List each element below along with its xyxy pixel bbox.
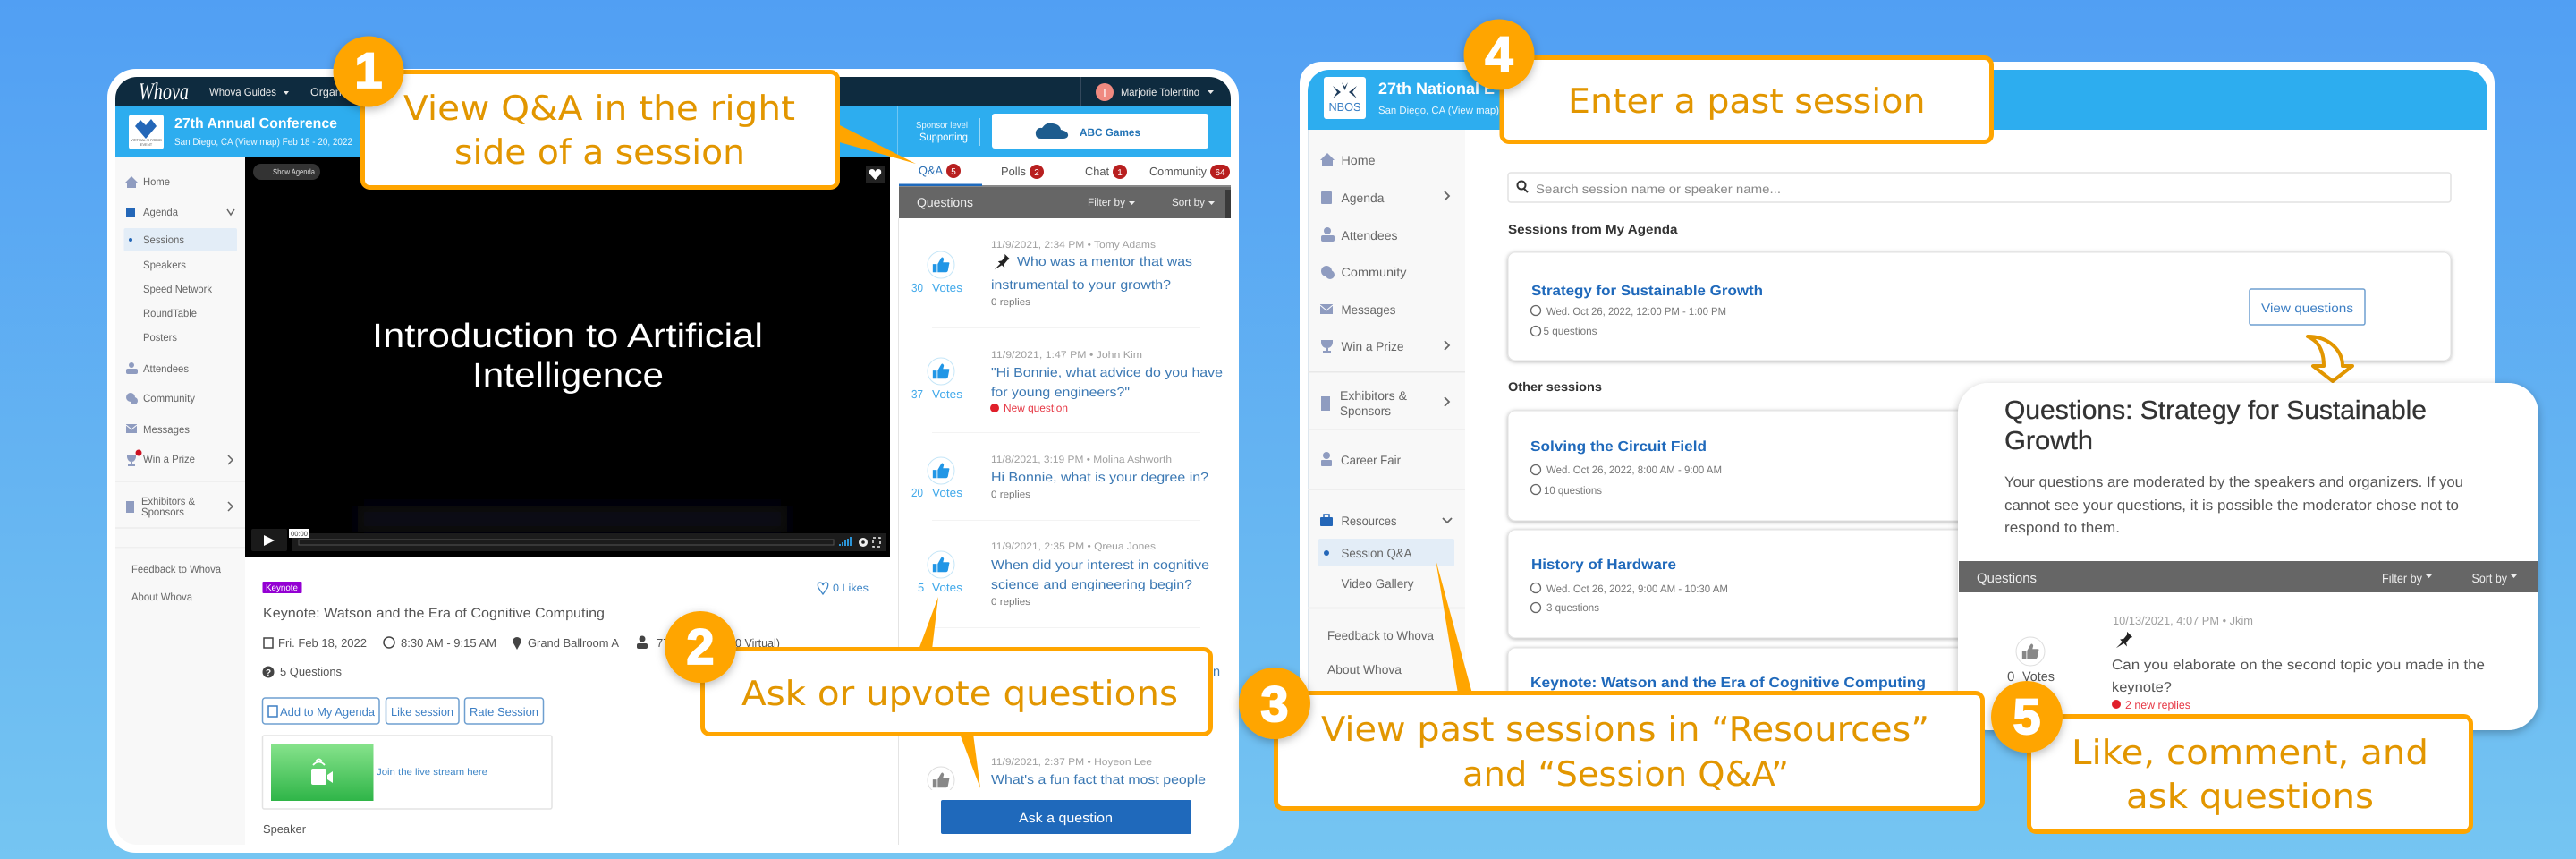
question 4: [918, 541, 1209, 608]
video title: Intelligence: [472, 357, 664, 395]
popup questions toolbar: Filter by: [2382, 571, 2422, 585]
popup question item: [2007, 614, 2485, 711]
sidebar navigation: Video Gallery: [1342, 576, 1413, 591]
sidebar navigation: RoundTable: [143, 307, 197, 319]
session action buttons: [263, 698, 544, 724]
session card: keynote: [1504, 646, 1958, 691]
popup questions toolbar: Questions: [1977, 571, 2037, 586]
speaker heading: Speaker: [263, 822, 307, 836]
callout 3: view past sessions: [1239, 559, 1982, 809]
sidebar navigation: Messages: [143, 423, 190, 436]
video player: Show Agenda: [273, 167, 315, 176]
session action buttons: Rate Session: [470, 705, 538, 719]
question 2: Votes: [932, 387, 963, 401]
event header bar: VIRTUAL / HYBRID: [131, 138, 162, 142]
popup description: cannot see your questions, it is possible the moderator chose not to: [2004, 498, 2459, 514]
sidebar navigation: Session Q&A: [1342, 546, 1412, 560]
question 2: 11/9/2021, 1:47 PM • John Kim: [991, 350, 1142, 361]
top navigation bar: Organizer: [310, 86, 360, 98]
question 1: 0 replies: [991, 297, 1031, 308]
sidebar navigation: About Whova: [131, 591, 192, 603]
question 1: 30: [911, 281, 923, 294]
sidebar navigation: Attendees: [143, 362, 189, 375]
sidebar navigation: Feedback to Whova: [1327, 628, 1434, 642]
callout 4: enter past session: Enter a past session: [1568, 81, 1925, 121]
question 1: Votes: [932, 281, 963, 294]
live stream card: [263, 736, 552, 809]
session tabs: Q&A: [919, 164, 943, 177]
event header bar: [115, 106, 1231, 157]
questions toolbar: Sort by: [1172, 196, 1205, 208]
sidebar navigation: Resources: [1342, 514, 1397, 528]
sidebar navigation: Feedback to Whova: [131, 563, 221, 575]
sidebar navigation: Win a Prize: [143, 453, 195, 465]
question 3: Votes: [932, 486, 963, 499]
video title: Introduction to Artificial: [372, 318, 763, 355]
popup description: respond to them.: [2004, 520, 2120, 536]
sidebar navigation: Community: [143, 392, 195, 404]
session tabs: 64: [1215, 168, 1225, 178]
popup description: Your questions are moderated by the speakers and organizers. If you: [2004, 474, 2463, 490]
panel: live session page: [107, 69, 1239, 853]
event header bar: 27th Annual Conference: [174, 116, 337, 132]
live stream card: Join the live stream here: [377, 767, 487, 778]
step badge 2: [665, 611, 736, 683]
question 4: 5: [918, 581, 924, 594]
event header bar: Supporting: [919, 131, 968, 143]
sidebar navigation: [1308, 130, 1465, 691]
video player: [245, 157, 890, 557]
sidebar navigation: Home: [143, 175, 170, 188]
popup question item: 2 new replies: [2125, 699, 2190, 711]
event header: San Diego, CA (View map): [1378, 106, 1499, 116]
session details: Grand Ballroom A: [528, 636, 619, 650]
session tabs: 2: [1034, 168, 1039, 178]
sidebar navigation: Speakers: [143, 259, 186, 271]
search box: Search session name or speaker name...: [1536, 182, 1781, 196]
step badge 3: [1239, 668, 1310, 739]
event header bar: ABC Games: [1080, 126, 1140, 139]
panel: live session page: n: [1213, 665, 1220, 679]
questions toolbar: [899, 187, 1231, 218]
session card: solving the circuit field: Wed. Oct 26, 2022, 8:00 AM - 9:00 AM: [1546, 464, 1722, 476]
event header bar: Sponsor level: [916, 121, 968, 131]
callout 5: like comment ask: ask questions: [2126, 777, 2374, 816]
session details: ?: [266, 668, 271, 678]
session card: history of hardware: [1504, 528, 1958, 642]
question 2: New question: [1004, 402, 1068, 414]
callout 4: enter past session: [1463, 20, 1991, 141]
session details: 0 Virtual): [735, 636, 780, 650]
callout 3: view past sessions: and “Session Q&A”: [1462, 754, 1789, 794]
callout 1: view Q&A: side of a session: [454, 132, 745, 172]
questions toolbar: Filter by: [1088, 196, 1125, 208]
session details: 77: [657, 636, 669, 650]
popup title: [2004, 396, 2427, 455]
popup title: Growth: [2004, 427, 2093, 455]
sidebar navigation: Home: [1342, 153, 1376, 167]
session card: solving the circuit field: [1504, 408, 1959, 524]
question 5: [927, 758, 1206, 790]
step badge 5: 5: [2012, 688, 2041, 744]
questions toolbar: Questions: [917, 195, 973, 209]
sidebar navigation: Win a Prize: [1342, 339, 1404, 353]
question 1: 11/9/2021, 2:34 PM • Tomy Adams: [991, 240, 1157, 251]
event header bar: EVENT: [140, 142, 153, 147]
step badge 4: [1463, 20, 1535, 89]
session tabs: 1: [1117, 168, 1123, 178]
sidebar navigation: Sessions: [143, 234, 184, 246]
callout 2: ask or upvote: Ask or upvote questions: [741, 674, 1178, 713]
sidebar navigation: Exhibitors &: [1340, 388, 1408, 403]
sidebar navigation: Agenda: [1342, 191, 1385, 205]
session card: strategy for sustainable growth: 5 questions: [1544, 325, 1597, 337]
step badge 3: 3: [1260, 676, 1289, 732]
question 2: [911, 350, 1223, 414]
session details: [263, 582, 869, 678]
question 4: When did your interest in cognitive: [991, 558, 1209, 573]
step badge 2: 2: [686, 618, 715, 675]
event header: 27th National E: [1378, 80, 1495, 98]
session details: Fri. Feb 18, 2022: [278, 636, 367, 650]
session card: history of hardware: Wed. Oct 26, 2022, 9:00 AM - 10:30 AM: [1546, 583, 1728, 595]
top navigation bar: T: [1101, 86, 1108, 99]
sidebar navigation: Messages: [1342, 302, 1395, 317]
sidebar navigation: [115, 176, 245, 601]
event header bar: San Diego, CA (View map) Feb 18 - 20, 2022: [174, 137, 352, 148]
view questions button: View questions: [2261, 301, 2353, 315]
session tabs: Chat: [1085, 165, 1109, 178]
panel: questions popup: [1958, 383, 2538, 730]
session card: solving the circuit field: Solving the Circuit Field: [1530, 439, 1707, 455]
popup question item: Votes: [2022, 669, 2055, 685]
popup question item: 10/13/2021, 4:07 PM • Jkim: [2113, 614, 2253, 627]
question 3: 0 replies: [991, 489, 1031, 500]
session details: 8:30 AM - 9:15 AM: [401, 636, 496, 650]
question 2: for young engineers?": [991, 386, 1130, 400]
sidebar navigation: Agenda: [143, 206, 178, 218]
question 2: "Hi Bonnie, what advice do you have: [991, 366, 1223, 380]
top navigation bar: Whova: [139, 78, 189, 105]
step badge 5: [1991, 681, 2063, 753]
popup description: [2004, 474, 2463, 536]
question 3: 20: [911, 486, 923, 499]
heading: sessions from my agenda: Sessions from My Agenda: [1508, 222, 1678, 236]
question 3: Hi Bonnie, what is your degree in?: [991, 471, 1208, 485]
top navigation bar: Marjorie Tolentino: [1121, 86, 1199, 98]
sidebar navigation: Career Fair: [1341, 453, 1401, 467]
popup questions toolbar: [1959, 561, 2538, 592]
question 4: 0 replies: [991, 597, 1031, 608]
step badge 1: [333, 36, 404, 107]
video title: [372, 318, 763, 395]
sidebar navigation: Posters: [143, 331, 177, 344]
question 4: 11/9/2021, 2:35 PM • Qreua Jones: [991, 541, 1157, 552]
callout 3: view past sessions: View past sessions in “Resources”: [1321, 710, 1929, 749]
session card: strategy for sustainable growth: Strategy for Sustainable Growth: [1531, 284, 1763, 299]
question 5: What's a fun fact that most people: [991, 773, 1206, 787]
sidebar navigation: Exhibitors &: [141, 495, 195, 507]
heading: other sessions: Other sessions: [1508, 379, 1602, 394]
popup question item: 0: [2007, 669, 2014, 685]
session card: history of hardware: History of Hardware: [1531, 557, 1676, 573]
event header: NBOS: [1329, 100, 1361, 114]
session action buttons: Like session: [391, 705, 453, 719]
popup title: Questions: Strategy for Sustainable: [2004, 396, 2427, 425]
session card: strategy for sustainable growth: [1508, 252, 2451, 361]
top navigation bar: Whova Guides: [209, 86, 276, 98]
session details: Keynote: Watson and the Era of Cognitive Computing: [263, 606, 605, 621]
popup question item: Can you elaborate on the second topic you made in the: [2112, 658, 2485, 673]
step badge 4: 4: [1485, 26, 1513, 82]
top navigation bar: [115, 77, 1231, 106]
question 5: 11/9/2021, 2:37 PM • Hoyeon Lee: [991, 757, 1152, 768]
sidebar navigation: Sponsors: [1340, 404, 1391, 418]
session tabs: Community: [1149, 165, 1207, 178]
sidebar navigation: Community: [1342, 265, 1406, 279]
session details: 0 Likes: [833, 582, 869, 594]
session card: keynote: Keynote: Watson and the Era of Cognitive Computing: [1530, 676, 1926, 691]
panel: past sessions page: [1300, 62, 2495, 691]
callout 5: like comment ask: Like, comment, and: [2072, 733, 2428, 772]
session card: history of hardware: 3 questions: [1546, 601, 1599, 614]
question 1: instrumental to your growth?: [991, 278, 1171, 293]
session details: Keynote: [266, 583, 298, 593]
sidebar navigation: Attendees: [1342, 228, 1397, 242]
callout 2: ask or upvote: [665, 597, 1211, 788]
session tabs: 5: [951, 167, 956, 177]
sidebar navigation: Speed Network: [143, 283, 213, 295]
question 1: Who was a mentor that was: [1017, 255, 1192, 269]
session action buttons: Add to My Agenda: [280, 705, 376, 719]
session card: solving the circuit field: 10 questions: [1544, 484, 1602, 497]
question 4: Votes: [932, 581, 963, 594]
callout 1: view Q&A: View Q&A in the right: [403, 89, 795, 128]
arrow: view questions to popup: [2308, 336, 2352, 381]
event header: [1308, 70, 2487, 130]
video player: 00:00: [291, 530, 308, 538]
callout 1: view Q&A: [333, 36, 916, 188]
sidebar navigation: Sponsors: [141, 506, 184, 518]
ask a question button: Ask a question: [1019, 811, 1113, 826]
session card: strategy for sustainable growth: Wed. Oct 26, 2022, 12:00 PM - 1:00 PM: [1546, 305, 1726, 318]
session details: 5 Questions: [280, 665, 342, 678]
session tabs: Polls: [1001, 165, 1026, 178]
callout 5: like comment ask: [1991, 681, 2470, 832]
ask a question button: [941, 800, 1191, 834]
popup questions toolbar: Sort by: [2472, 571, 2507, 585]
view questions button: [2250, 289, 2365, 325]
search box: [1508, 173, 2451, 202]
question 4: science and engineering begin?: [991, 578, 1192, 592]
step badge 1: 1: [354, 42, 383, 98]
popup question item: keynote?: [2112, 680, 2172, 695]
session tabs: [899, 164, 1231, 187]
question 2: 37: [911, 387, 923, 401]
question 1: [911, 240, 1192, 308]
sidebar navigation: About Whova: [1327, 662, 1402, 676]
question 3: [911, 455, 1208, 500]
question 3: 11/8/2021, 3:19 PM • Molina Ashworth: [991, 455, 1172, 465]
